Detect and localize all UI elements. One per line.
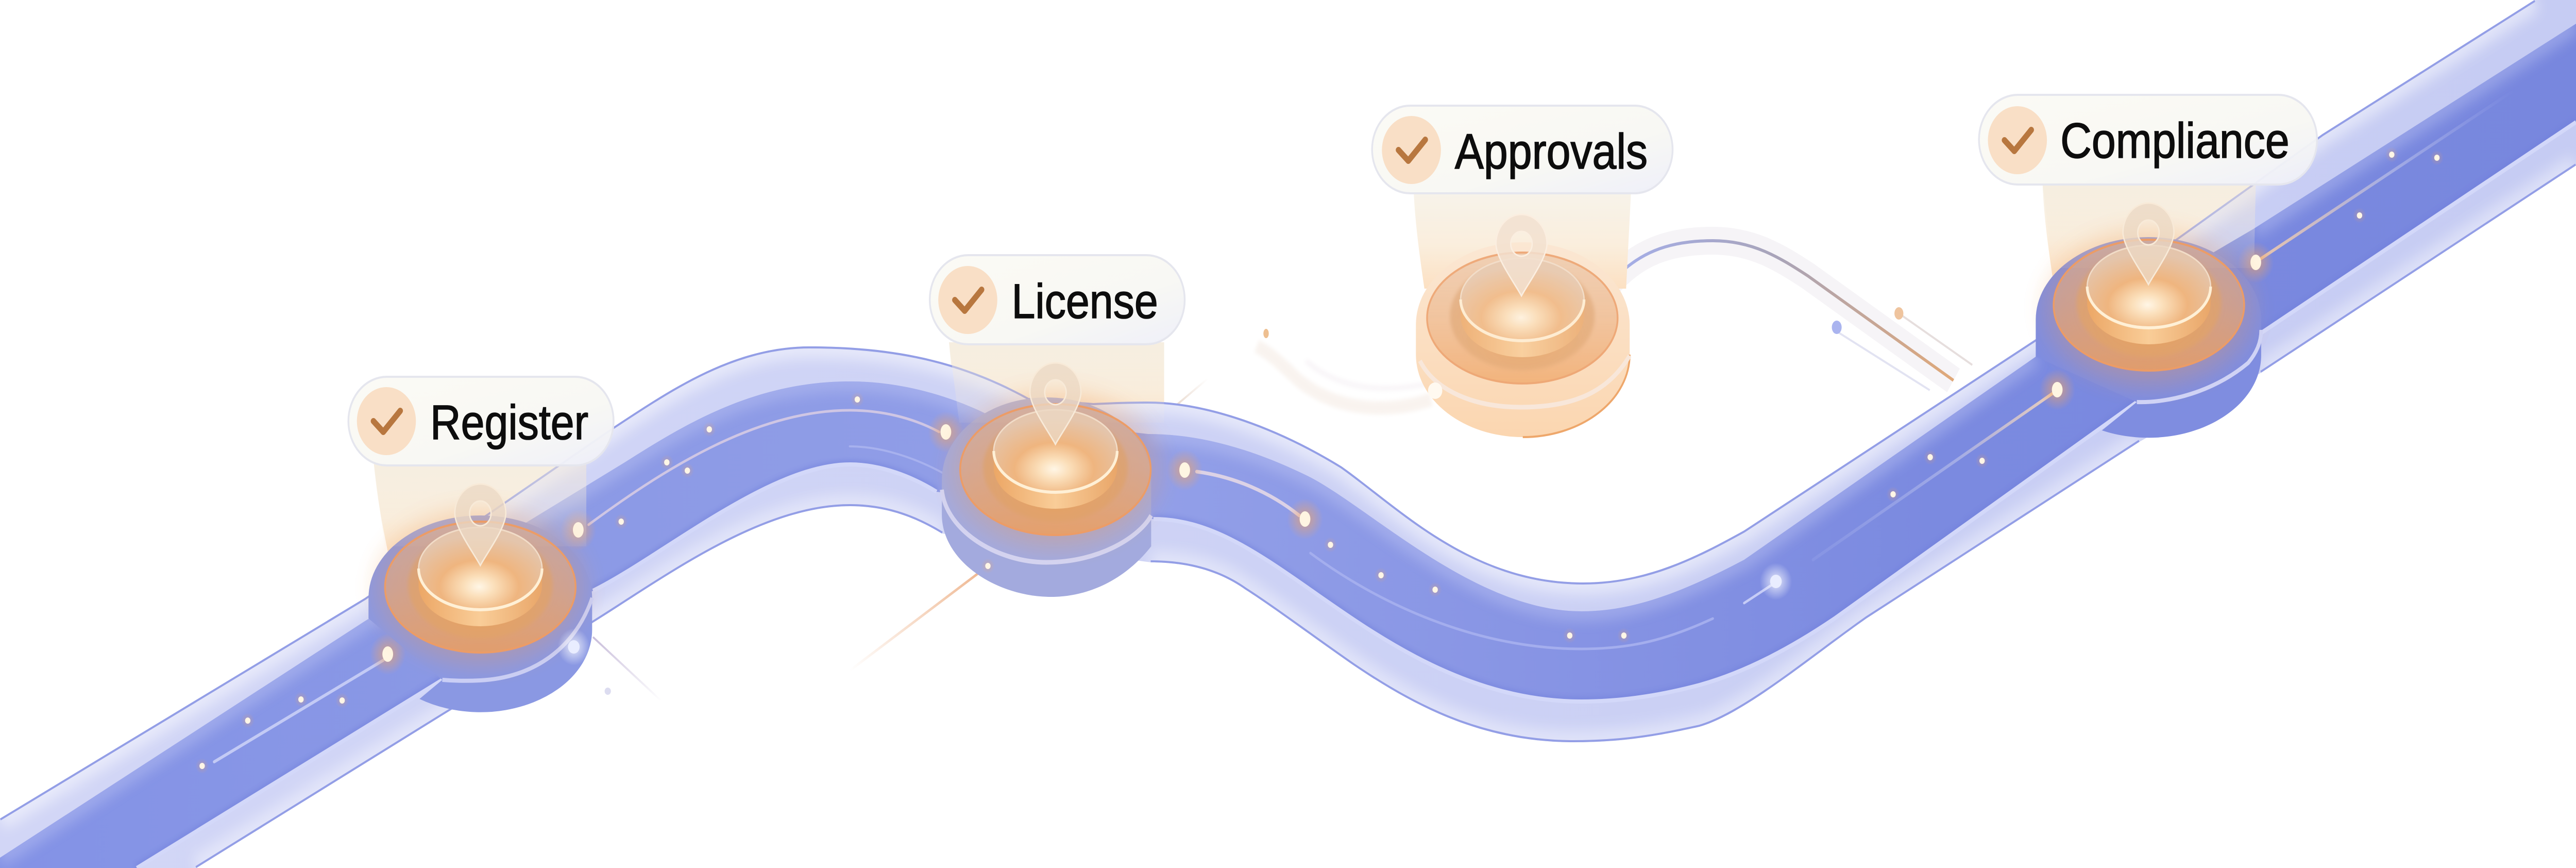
hub 2 plate dot <box>981 558 995 574</box>
icon: hub 1 location pin <box>455 484 506 565</box>
hub 4 glowing disc <box>2054 240 2244 371</box>
pill background <box>930 255 1184 344</box>
icon: check badge <box>1382 116 1441 184</box>
hub 3 glowing disc <box>1427 253 1618 383</box>
hub 4 panel overlay <box>2042 182 2256 268</box>
hub 3: Approvals <box>1416 214 1630 437</box>
glowing dots on the road <box>195 147 2444 774</box>
pill background <box>1372 106 1673 193</box>
label pill: Compliance <box>1979 95 2317 185</box>
faint connector lines behind the road <box>593 241 1972 701</box>
hub 1 glowing disc <box>385 522 575 653</box>
hub 4 plate rim <box>2137 330 2261 402</box>
thin lines along the road <box>214 91 2513 762</box>
icon: check badge <box>1988 106 2047 174</box>
label text: Compliance <box>2060 113 2290 169</box>
label text: License <box>1012 273 1158 328</box>
icon: check badge <box>357 387 416 455</box>
label pill: Register <box>348 377 614 465</box>
hub 2 panel overlay <box>949 342 1164 423</box>
hub 2 plate rim <box>942 490 1151 562</box>
hub 4: Compliance <box>2030 182 2268 438</box>
pill background <box>348 377 614 465</box>
label pill: License <box>930 255 1184 344</box>
hub 1: Register <box>361 464 599 712</box>
hub 1 orange glow <box>361 496 599 678</box>
hub 2 glowing disc <box>960 404 1151 535</box>
label text: Register <box>430 394 588 449</box>
hub 3 base plate <box>1416 242 1630 437</box>
hub 1 panel overlay <box>374 464 586 546</box>
pill background <box>1979 95 2317 185</box>
hub 3 plate bottom edge <box>1523 355 1630 437</box>
hub 2 base plate <box>942 397 1151 597</box>
hub 2: License <box>937 342 1175 597</box>
hub 4 base plate <box>2036 237 2261 438</box>
icon: hub 3 location pin <box>1496 214 1547 296</box>
hub 1 plate dot <box>557 628 590 665</box>
icon: check badge <box>938 266 997 334</box>
icon: hub 4 location pin <box>2123 203 2174 285</box>
hub 1 base plate <box>368 515 592 712</box>
cream light panels behind the road <box>374 182 2256 562</box>
hub 2 orange glow <box>937 378 1175 560</box>
label pill: Approvals <box>1372 106 1673 193</box>
hub 3 left dot <box>1428 382 1442 399</box>
hub 1 plate rim <box>443 598 592 681</box>
hub 3 plate rim <box>1420 356 1630 407</box>
hub 4 orange glow <box>2030 217 2268 398</box>
icon: hub 2 location pin <box>1030 363 1081 444</box>
label text: Approvals <box>1455 124 1648 179</box>
